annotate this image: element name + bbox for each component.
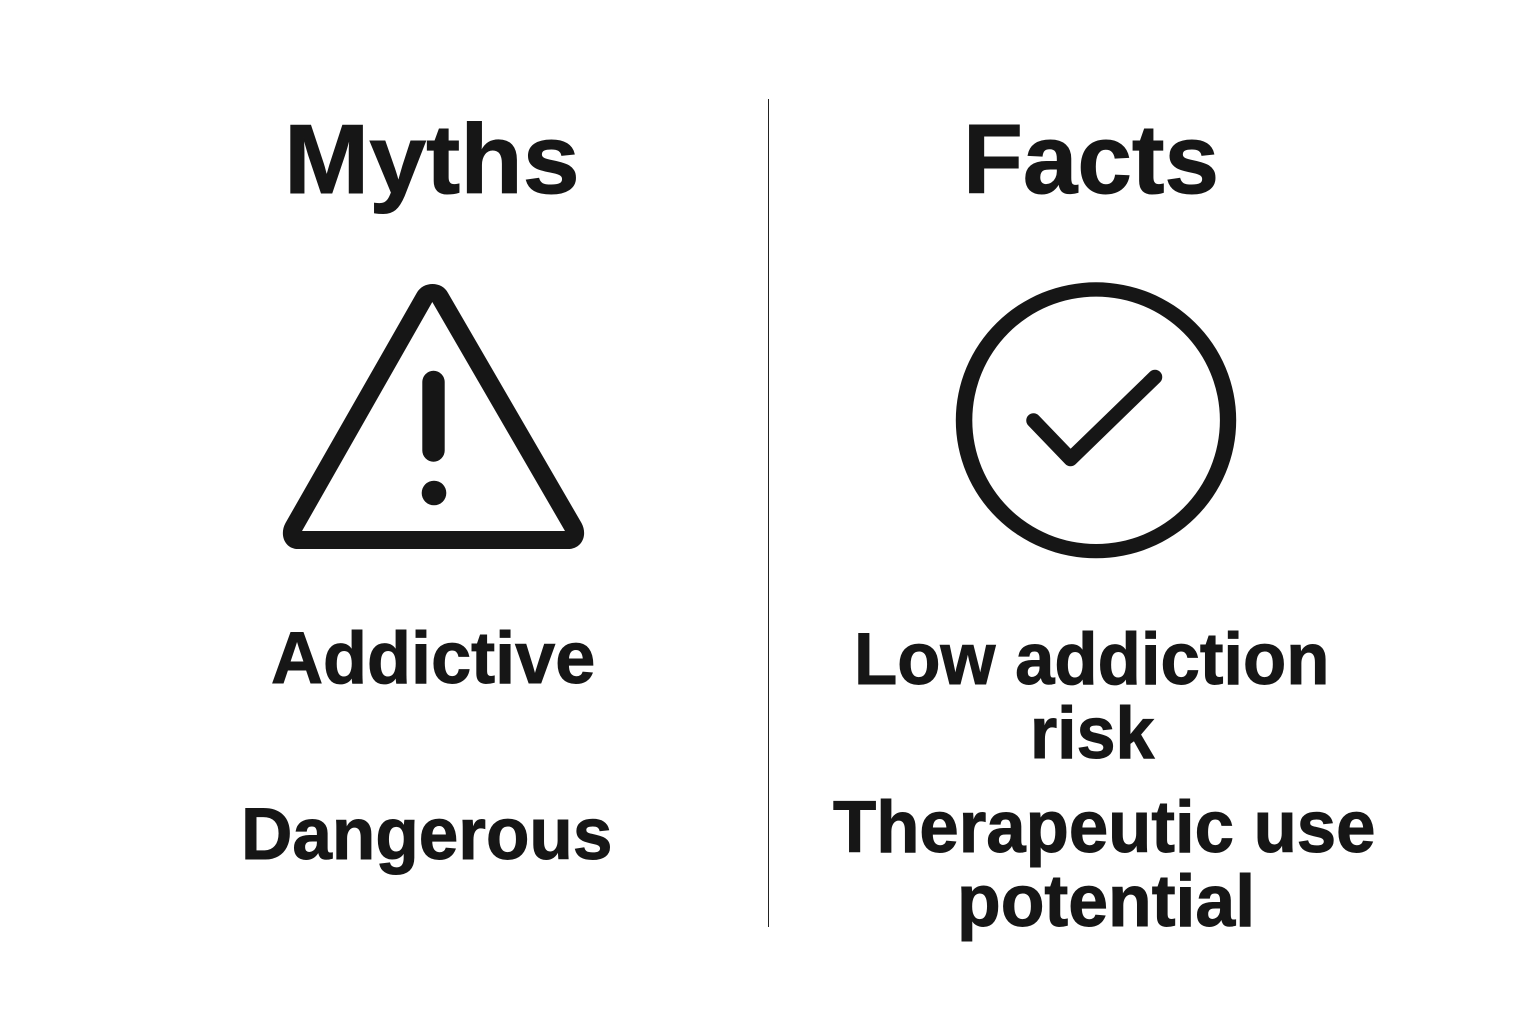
heading: Facts: Facts [963, 104, 1219, 214]
fact text: Low addiction risk [854, 618, 1329, 774]
heading: Myths: Myths [284, 104, 580, 214]
fact text: Therapeutic use potential: Therapeutic use [833, 786, 1375, 868]
myth text: Addictive: Addictive [271, 618, 595, 698]
fact text: Therapeutic use potential: potential [957, 860, 1255, 942]
center divider [768, 99, 769, 927]
myth text: Dangerous: Dangerous [240, 794, 612, 874]
fact text: Therapeutic use potential [833, 786, 1375, 942]
fact text: Low addiction risk: Low addiction [854, 618, 1329, 700]
fact text: Low addiction risk: risk [1030, 692, 1154, 774]
